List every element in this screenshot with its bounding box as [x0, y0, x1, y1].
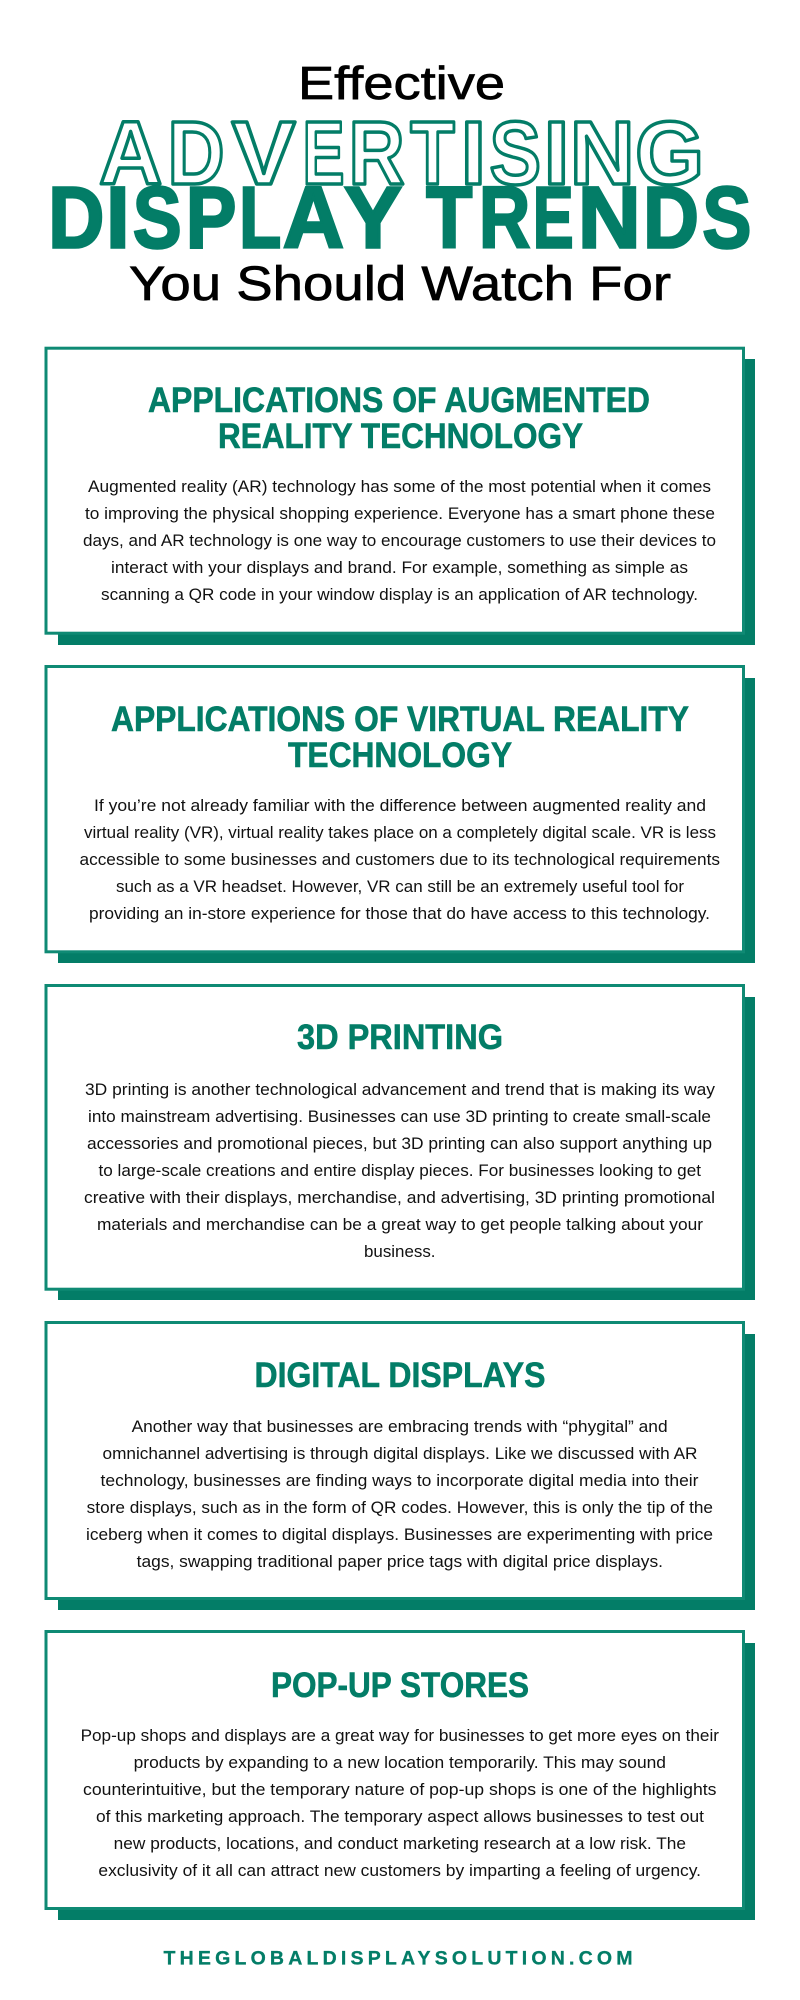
- heading: augmented reality: APPLICATIONS OF AUGMENTED: [148, 381, 650, 420]
- text block: pop-up stores: new products, locations, and conduct marketing research at a low risk. The: [114, 1834, 686, 1853]
- text block: digital displays: tags, swapping traditional paper price tags with digital price displays.: [137, 1552, 663, 1571]
- title line: DISPLAY TRENDS solid: T: [426, 169, 472, 266]
- heading: 3D printing: 3D PRINTING: [297, 1018, 503, 1057]
- title line: ADVERTISING outlined: R: [349, 104, 405, 204]
- heading: virtual reality: [111, 700, 689, 775]
- text block: 3D printing: business.: [364, 1242, 436, 1261]
- heading: augmented reality: REALITY TECHNOLOGY: [218, 417, 583, 456]
- text block: pop-up stores: counterintuitive, but the temporary nature of pop-up shops is one of the highlights: [83, 1780, 716, 1799]
- heading: pop-up stores: POP-UP STORES: [271, 1666, 529, 1705]
- panel: pop-up stores: [46, 1632, 755, 1920]
- title line: DISPLAY TRENDS solid: N: [578, 169, 641, 266]
- title line: DISPLAY TRENDS solid: D: [48, 169, 104, 266]
- title: [48, 57, 751, 311]
- heading: virtual reality: APPLICATIONS OF VIRTUAL REALITY: [111, 700, 689, 739]
- text block: digital displays: Another way that businesses are embracing trends with “phygital” and: [132, 1417, 668, 1436]
- text block: augmented reality: [83, 477, 716, 604]
- text block: virtual reality: accessible to some businesses and customers due to its technological requirements: [80, 850, 720, 869]
- title line: ADVERTISING outlined: E: [302, 104, 344, 204]
- footer website: THEGLOBALDISPLAYSOLUTION.COM: [164, 1948, 632, 1970]
- text block: 3D printing: to large-scale creations and entire display pieces. For businesses looking to get: [98, 1161, 701, 1180]
- title line: Effective: Effective: [298, 57, 505, 109]
- text block: virtual reality: virtual reality (VR), virtual reality takes place on a completely digital scale. VR is less: [84, 823, 716, 842]
- title line: DISPLAY TRENDS solid: P: [186, 169, 236, 266]
- title line: You Should Watch For: You Should Watch For: [129, 258, 671, 311]
- title line: ADVERTISING outlined: V: [232, 104, 296, 204]
- text block: 3D printing: materials and merchandise can be a great way to get people talking about your: [97, 1215, 703, 1234]
- text block: digital displays: store displays, such as in the form of QR codes. However, this is only the tip of the: [87, 1498, 713, 1517]
- heading: virtual reality: TECHNOLOGY: [288, 736, 512, 775]
- text block: 3D printing: 3D printing is another technological advancement and trend that is making its way: [85, 1080, 716, 1099]
- title line: DISPLAY TRENDS solid: R: [479, 169, 530, 266]
- panel: digital displays: [46, 1322, 755, 1610]
- title line: DISPLAY TRENDS solid: E: [533, 169, 574, 266]
- title line: ADVERTISING outlined: S: [490, 104, 541, 204]
- title line: DISPLAY TRENDS solid: S: [133, 169, 182, 266]
- heading: augmented reality: [148, 381, 650, 456]
- title line: DISPLAY TRENDS solid: I: [106, 169, 130, 266]
- heading: digital displays: DIGITAL DISPLAYS: [254, 1356, 546, 1395]
- text block: digital displays: technology, businesses are finding ways to incorporate digital media into their: [100, 1471, 699, 1490]
- panel: virtual reality: [46, 666, 755, 963]
- text block: pop-up stores: products by expanding to a new location temporarily. This may sound: [134, 1753, 666, 1772]
- text block: digital displays: omnichannel advertising is through digital displays. Like we discussed with AR: [102, 1444, 698, 1463]
- title line: DISPLAY TRENDS solid: S: [702, 169, 751, 266]
- title line: ADVERTISING outlined: D: [168, 104, 225, 204]
- title line: DISPLAY TRENDS solid: L: [239, 169, 281, 266]
- text block: virtual reality: providing an in-store experience for those that do have access to this technology.: [89, 904, 710, 923]
- text block: virtual reality: such as a VR headset. However, VR can still be an extremely useful tool for: [116, 877, 684, 896]
- text block: virtual reality: If you’re not already familiar with the difference between augmented reality and: [94, 796, 706, 815]
- title line: DISPLAY TRENDS solid: Y: [344, 169, 402, 266]
- text block: 3D printing: accessories and promotional pieces, but 3D printing can also support anything up: [87, 1134, 712, 1153]
- text block: augmented reality: Augmented reality (AR) technology has some of the most potential when it comes: [88, 477, 711, 496]
- text block: 3D printing: creative with their displays, merchandise, and advertising, 3D printing promotional: [84, 1188, 715, 1207]
- title line: DISPLAY TRENDS solid: D: [643, 169, 699, 266]
- text block: pop-up stores: of this marketing approach. The temporary aspect allows businesses to test out: [96, 1807, 704, 1826]
- title line: ADVERTISING outlined: I: [544, 104, 570, 204]
- title line: DISPLAY TRENDS solid: A: [283, 169, 344, 266]
- text block: 3D printing: [84, 1080, 716, 1261]
- title line: ADVERTISING outlined: T: [410, 104, 455, 204]
- text block: pop-up stores: Pop-up shops and displays are a great way for businesses to get more eyes on their: [81, 1726, 719, 1745]
- title line: ADVERTISING outlined: I: [461, 104, 486, 204]
- text block: augmented reality: days, and AR technology is one way to encourage customers to use their devices to: [83, 531, 716, 550]
- text block: 3D printing: into mainstream advertising. Businesses can use 3D printing to create small-scale: [88, 1107, 711, 1126]
- text block: digital displays: [86, 1417, 713, 1571]
- text block: virtual reality: [80, 796, 720, 923]
- text block: augmented reality: to improving the physical shopping experience. Everyone has a smart phone these: [85, 504, 715, 523]
- text block: pop-up stores: [81, 1726, 719, 1880]
- text block: digital displays: iceberg when it comes to digital displays. Businesses are experimenting with price: [86, 1525, 713, 1544]
- title line: ADVERTISING outlined: A: [99, 104, 162, 204]
- panel: 3D printing: [46, 986, 755, 1300]
- text block: augmented reality: scanning a QR code in your window display is an application of AR technology.: [101, 585, 698, 604]
- title line: ADVERTISING outlined: N: [570, 104, 635, 204]
- title line: ADVERTISING outlined: G: [635, 104, 704, 204]
- text block: augmented reality: interact with your displays and brand. For example, something as simple as: [111, 558, 688, 577]
- panel: augmented reality: [46, 348, 755, 645]
- text block: pop-up stores: exclusivity of it all can attract new customers by imparting a feeling of urgency.: [98, 1861, 701, 1880]
